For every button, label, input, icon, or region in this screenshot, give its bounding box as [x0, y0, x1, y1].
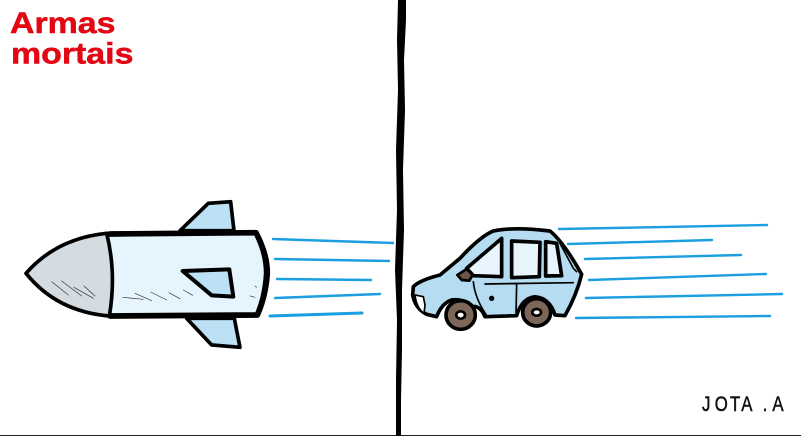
title	[10, 6, 133, 70]
headlight	[415, 295, 425, 313]
title: Armas	[10, 6, 115, 40]
top fin	[180, 202, 234, 231]
front window	[467, 238, 502, 277]
car speed lines	[559, 225, 782, 318]
nose cone	[26, 233, 112, 316]
middle window	[512, 241, 540, 278]
title: mortais	[11, 36, 133, 70]
bottom fin	[187, 318, 240, 347]
heavy hull outline	[110, 233, 267, 316]
rear window	[546, 242, 562, 276]
car body	[413, 229, 582, 317]
door lines	[473, 282, 573, 315]
divider line	[395, 0, 406, 436]
missile	[26, 202, 268, 347]
signature: JOTA.A	[702, 393, 784, 417]
front wheel	[446, 301, 475, 329]
missile body	[107, 232, 268, 316]
missile speed lines	[270, 239, 393, 316]
rear pillar	[560, 243, 577, 272]
door handle	[489, 296, 494, 301]
wing mirror	[457, 269, 473, 281]
middle fin	[183, 269, 233, 297]
shading strokes	[52, 281, 257, 301]
rear wheel	[523, 299, 551, 326]
car	[413, 229, 582, 329]
